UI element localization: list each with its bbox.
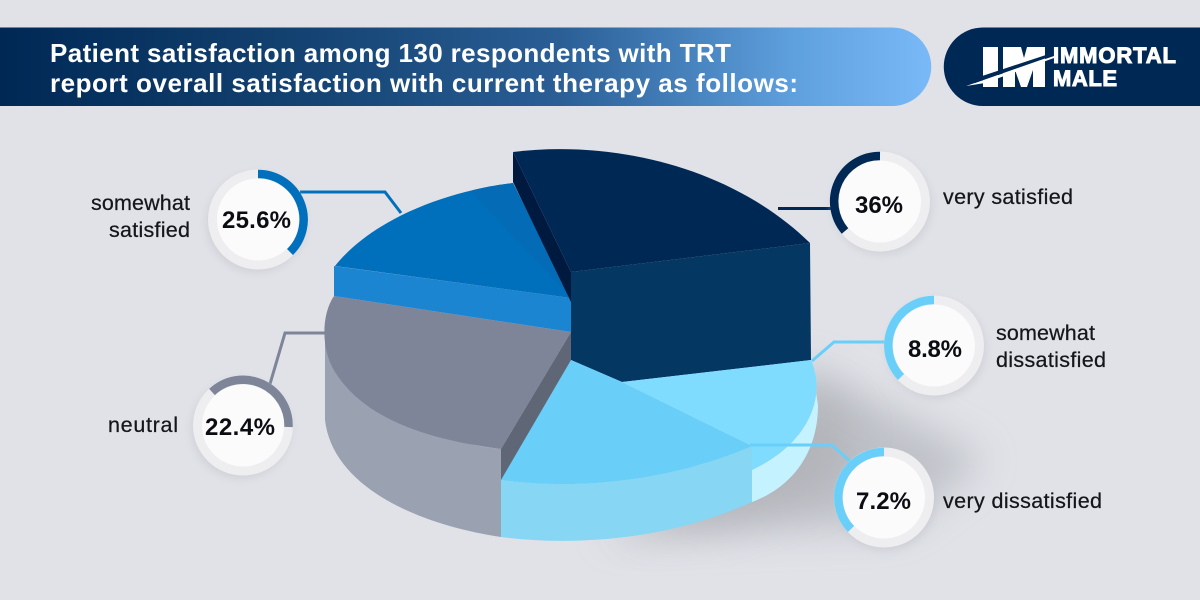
title: Patient satisfaction among 130 respondents with TRT bbox=[50, 38, 731, 68]
slice: very satisfied bbox=[513, 149, 811, 382]
title bbox=[50, 38, 798, 98]
callout: somewhat satisfied: 25.6% bbox=[222, 207, 291, 234]
callout: very satisfied: 36% bbox=[855, 192, 903, 219]
callout: somewhat dissatisfied: dissatisfied bbox=[996, 348, 1106, 372]
callout: somewhat dissatisfied: 8.8% bbox=[908, 336, 962, 363]
callout: very satisfied bbox=[830, 152, 1073, 255]
slice: somewhat dissatisfied bbox=[622, 360, 818, 502]
callout: neutral bbox=[108, 376, 293, 479]
slice: neutral bbox=[324, 296, 571, 537]
callout: very dissatisfied bbox=[834, 448, 1102, 551]
logo: IMMORTAL bbox=[1053, 43, 1176, 68]
title: report overall satisfaction with current therapy as follows: bbox=[50, 68, 798, 98]
callout: neutral: 22.4% bbox=[205, 414, 275, 441]
pie shadow bbox=[600, 365, 985, 535]
callout: very dissatisfied: 7.2% bbox=[856, 488, 911, 515]
slice: somewhat satisfied bbox=[334, 183, 571, 332]
slice: very dissatisfied bbox=[501, 360, 752, 541]
callout: somewhat dissatisfied bbox=[884, 296, 1106, 399]
callout: somewhat satisfied bbox=[91, 170, 308, 273]
connector lines bbox=[270, 192, 888, 464]
callout: somewhat satisfied: somewhat bbox=[91, 191, 190, 215]
callout: somewhat dissatisfied: somewhat bbox=[996, 321, 1095, 345]
callout: neutral: neutral bbox=[108, 413, 178, 437]
callout: very satisfied: very satisfied bbox=[943, 185, 1073, 209]
callout: very dissatisfied: very dissatisfied bbox=[943, 489, 1102, 513]
logo: MALE bbox=[1053, 66, 1117, 91]
logo bbox=[944, 28, 1200, 106]
callout: somewhat satisfied: satisfied bbox=[109, 218, 190, 242]
header banner bbox=[0, 28, 931, 106]
3D pie chart bbox=[324, 149, 818, 541]
